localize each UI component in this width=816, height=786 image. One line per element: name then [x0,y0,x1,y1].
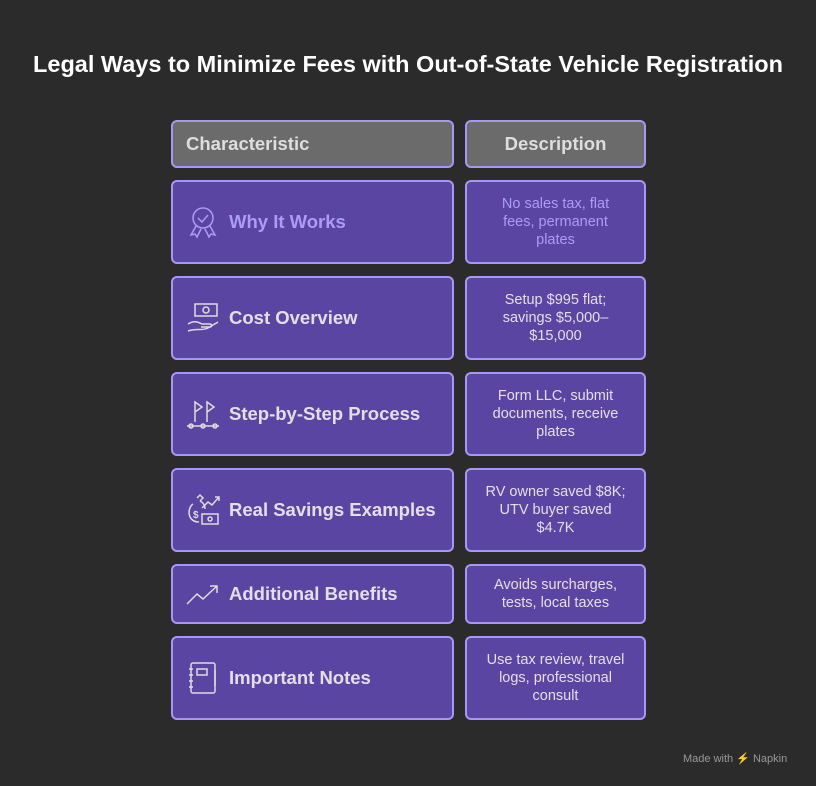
row: cost overview: Cost Overview [229,307,358,328]
row: cost overview [171,276,454,360]
row: why it works [171,180,454,264]
desc: additional benefits [465,564,646,624]
header: description [465,120,646,168]
desc: step by step [465,372,646,456]
row: real savings: Real Savings Examples [229,499,436,520]
row: additional benefits [171,564,454,624]
row: why it works: Why It Works [229,211,346,232]
row: real savings: $ [193,510,199,521]
title: Legal Ways to Minimize Fees with Out-of-State Vehicle Registration [33,51,783,77]
header: characteristic: Characteristic [186,133,309,154]
desc: real savings: RV owner saved $8K; UTV buyer saved $4.7K [486,484,625,536]
desc: important notes [465,636,646,720]
desc: step by step: Form LLC, submit documents, receive plates [493,388,618,440]
header: characteristic [171,120,454,168]
footer: made with napkin: Made with ⚡ Napkin [683,753,787,765]
desc: real savings [465,468,646,552]
row: step by step: Step-by-Step Process [229,403,420,424]
header: description: Description [505,133,606,154]
row: important notes: Important Notes [229,667,371,688]
desc: important notes: Use tax review, travel logs, professional consult [487,652,624,704]
desc: cost overview: Setup $995 flat; savings $5,000–$15,000 [503,292,608,344]
desc: why it works: No sales tax, flat fees, permanent plates [502,196,609,248]
desc: why it works [465,180,646,264]
row: important notes [171,636,454,720]
row: step by step [171,372,454,456]
desc: cost overview [465,276,646,360]
row: additional benefits: Additional Benefits [229,583,398,604]
desc: additional benefits: Avoids surcharges, tests, local taxes [494,577,617,611]
row: real savings [171,468,454,552]
